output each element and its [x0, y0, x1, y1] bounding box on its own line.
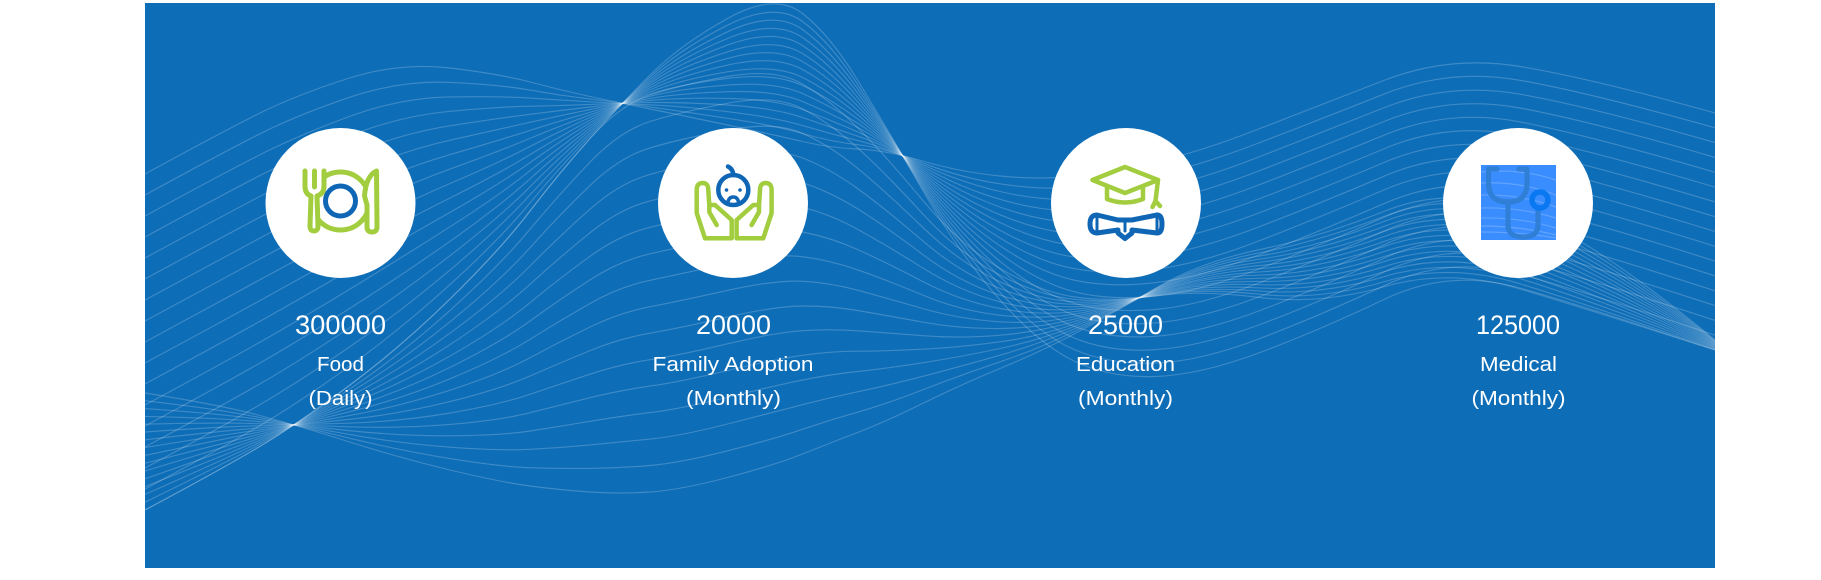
value: food: 300000 — [295, 310, 386, 340]
icon: graduation cap and diploma — [1090, 167, 1162, 238]
label: education: Education — [1076, 354, 1175, 376]
card: medical — [1443, 128, 1593, 410]
icon circle: food — [266, 128, 416, 278]
label: medical: Medical — [1480, 354, 1557, 376]
label: family adoption: Family Adoption — [652, 354, 814, 376]
icon circle: family adoption — [658, 128, 808, 278]
value: education: 25000 — [1088, 310, 1163, 340]
icon: stethoscope on blue square — [1481, 165, 1556, 240]
period: education: (Monthly) — [1078, 388, 1173, 410]
icon: baby held in two hands — [697, 166, 772, 238]
icon circle: education — [1051, 128, 1201, 278]
period: family adoption: (Monthly) — [686, 388, 781, 410]
period: medical: (Monthly) — [1472, 388, 1566, 410]
value: medical: 125000 — [1476, 310, 1560, 340]
card: family adoption — [652, 128, 814, 410]
card: education — [1051, 128, 1201, 410]
icon circle: medical — [1443, 128, 1593, 278]
period: food: (Daily) — [308, 388, 372, 410]
icon: plate with fork and knife — [305, 171, 377, 232]
card: food — [266, 128, 416, 410]
value: family adoption: 20000 — [696, 310, 771, 340]
label: food: Food — [317, 354, 364, 376]
